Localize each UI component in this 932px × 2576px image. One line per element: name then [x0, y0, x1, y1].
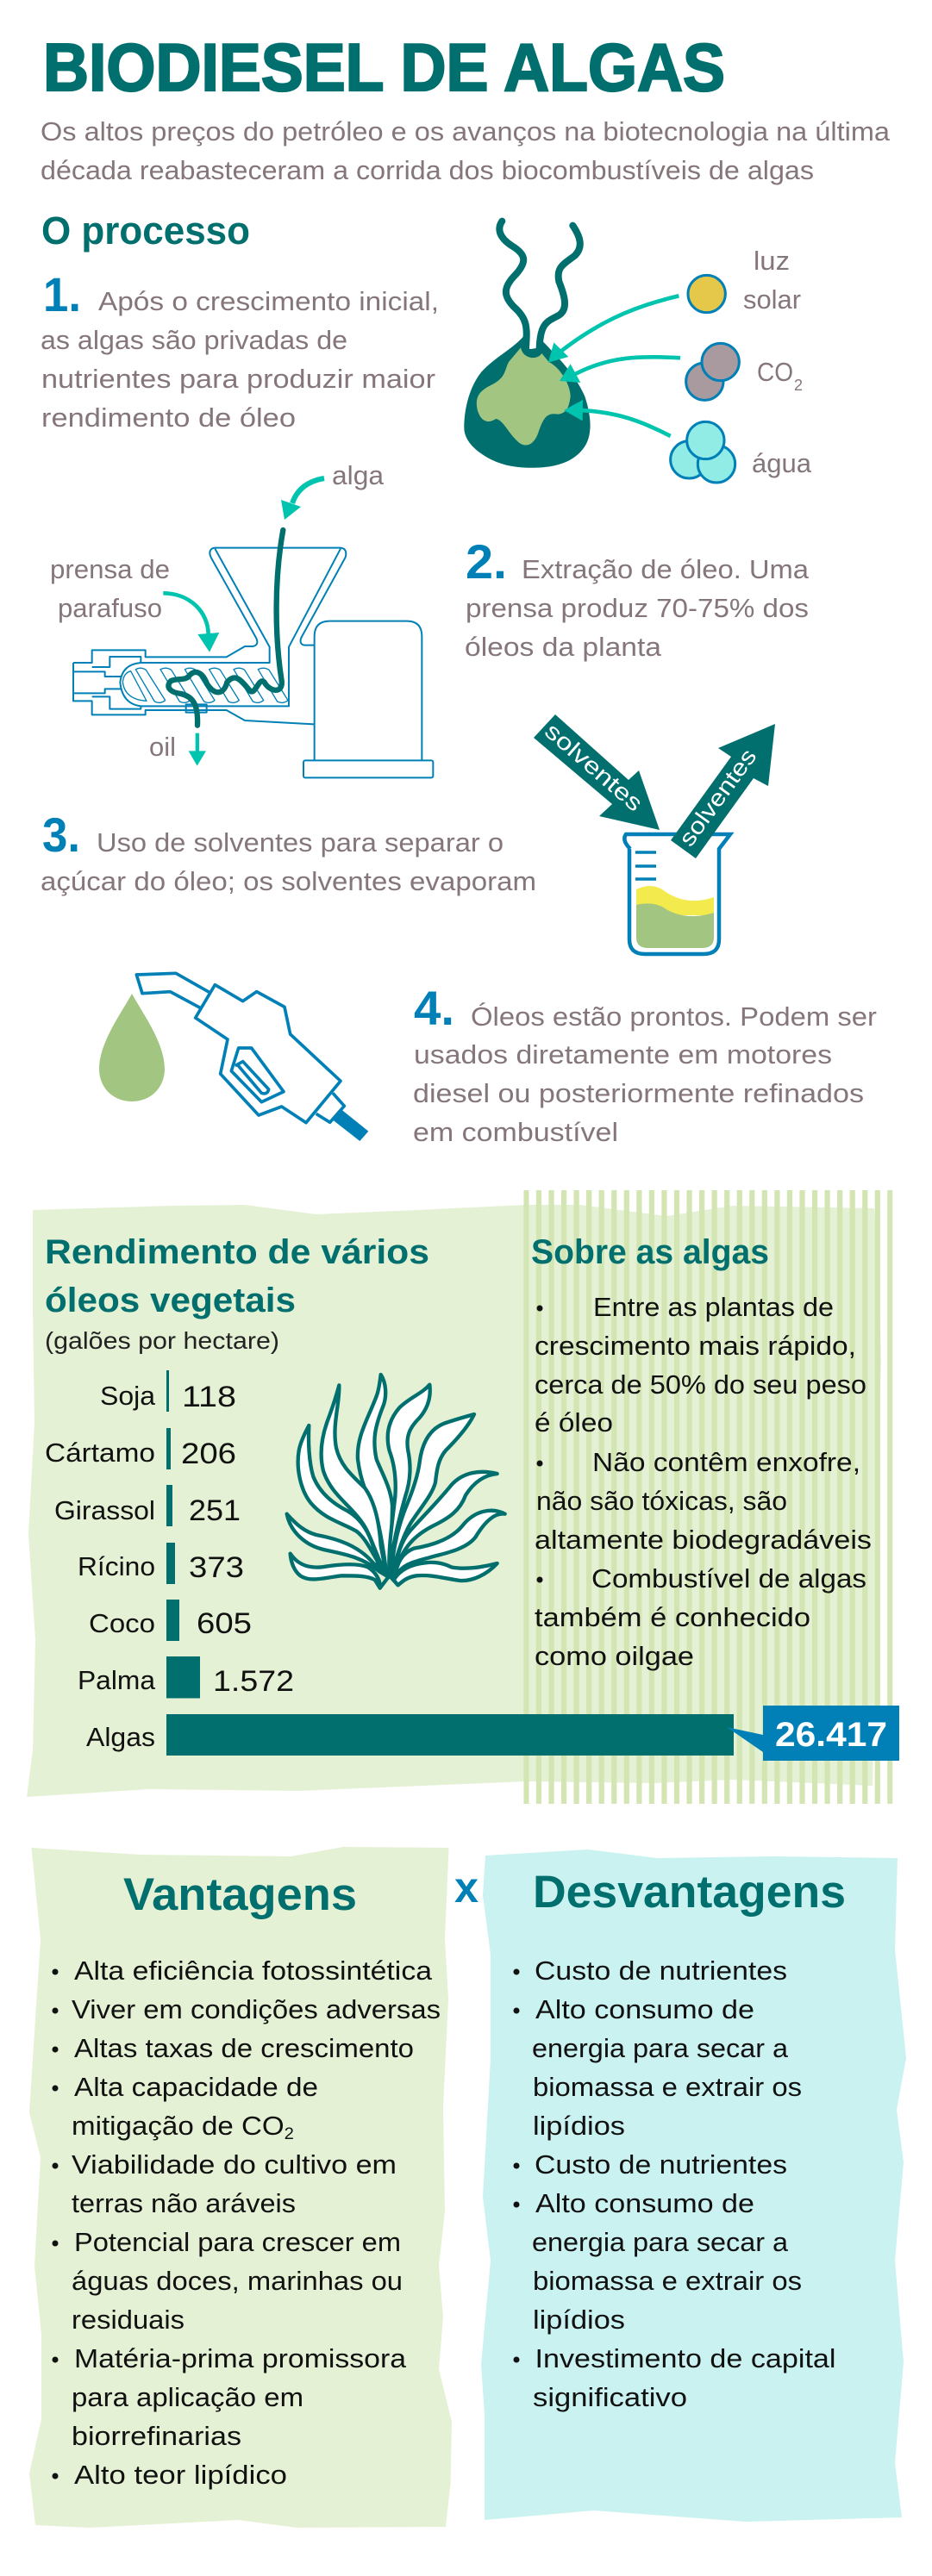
- bar values: 206: [181, 1438, 236, 1470]
- list: para aplicação em: [72, 2382, 303, 2412]
- step 4 text: diesel ou posteriormente refinados: [413, 1078, 864, 1108]
- label: prensa de parafuso: prensa de: [50, 554, 170, 584]
- step 4 text: usados diretamente em motores: [414, 1039, 832, 1070]
- label: CO2: 2: [794, 377, 803, 394]
- illustration: beaker: [624, 834, 730, 954]
- label: CO2: CO: [757, 357, 793, 387]
- step 1 text: nutrientes para produzir maior: [41, 364, 435, 394]
- list: biorrefinarias: [72, 2421, 241, 2451]
- list: about algae: Entre as plantas de: [593, 1292, 834, 1322]
- subtitle: década reabasteceram a corrida dos biocombustíveis de algas: [41, 155, 814, 185]
- arrow: solvents in: [534, 714, 660, 830]
- heading: Vantagens: [123, 1869, 357, 1920]
- bar labels: Girassol: [54, 1495, 155, 1525]
- list: lipídios: [533, 2305, 625, 2335]
- bar labels: [45, 1381, 156, 1752]
- list: Potencial para crescer em: [74, 2227, 401, 2257]
- step 4 text: 4.: [414, 981, 454, 1035]
- step 2 text: prensa produz 70-75% dos: [466, 593, 809, 623]
- step 1 text: [41, 267, 439, 433]
- list: 2: [285, 2125, 294, 2143]
- bars: [166, 1370, 734, 1756]
- list: about algae: como oilgae: [535, 1641, 694, 1671]
- heading: yield: óleos vegetais: [45, 1282, 296, 1319]
- step 2 text: 2.: [466, 534, 507, 589]
- step 2 text: óleos da planta: [465, 632, 662, 662]
- alga body: [464, 336, 591, 468]
- illustration: alga cell with inputs: [464, 221, 739, 483]
- title: BIODIESEL DE ALGAS: [43, 29, 725, 105]
- step 4 text: [413, 981, 877, 1147]
- bar labels: Soja: [100, 1381, 156, 1411]
- units note: (galões por hectare): [45, 1327, 279, 1354]
- label: prensa de parafuso: [50, 554, 170, 623]
- bar labels: Algas: [86, 1722, 155, 1752]
- list: Matéria-prima promissora: [74, 2343, 407, 2373]
- label: água: água: [752, 448, 812, 478]
- list: Viver em condições adversas: [72, 1994, 441, 2024]
- panel: desvantagens: [481, 1849, 906, 2522]
- arrow: oil out: [189, 733, 206, 766]
- list: residuais: [72, 2305, 185, 2335]
- list: about algae: Combustível de algas: [591, 1563, 866, 1594]
- heading: O processo: O processo: [41, 209, 250, 253]
- icon: water molecules: [671, 421, 735, 483]
- label: luz solar: [743, 246, 801, 315]
- heading: yield: [45, 1233, 429, 1319]
- illustration: screw press: [73, 530, 433, 777]
- label: oil: oil: [149, 732, 176, 762]
- alga interior: [477, 347, 571, 446]
- panel background: [27, 1205, 881, 1797]
- list: biomassa e extrair os: [533, 2072, 802, 2102]
- list: about algae: não são tóxicas, são: [536, 1486, 787, 1516]
- list: about algae: também é conhecido: [535, 1602, 810, 1632]
- list: águas doces, marinhas ou: [72, 2266, 403, 2296]
- step 1 text: Após o crescimento inicial,: [98, 286, 439, 316]
- icon: CO2 molecules: [686, 343, 739, 400]
- arrow: solvents in: solventes: [540, 718, 647, 816]
- step 3 text: [41, 808, 536, 896]
- bar values: 118: [182, 1381, 236, 1413]
- alga tendrils: [499, 221, 580, 347]
- step 3 text: 3.: [42, 808, 80, 862]
- bar labels: Palma: [78, 1665, 156, 1695]
- bar labels: Rícino: [78, 1551, 155, 1581]
- list: significativo: [533, 2382, 687, 2412]
- list: biomassa e extrair os: [533, 2266, 802, 2296]
- bar values: 251: [189, 1494, 241, 1527]
- bar chart: [45, 1370, 899, 1761]
- list: energia para secar a: [532, 2227, 789, 2257]
- arrow: solvents out: [671, 724, 775, 858]
- arrow: alga to press: [281, 478, 324, 520]
- callout: algae value: 26.417: [775, 1716, 887, 1754]
- list: energia para secar a: [532, 2033, 789, 2063]
- step 3 text: açúcar do óleo; os solventes evaporam: [41, 866, 536, 896]
- panel: vantagens: [29, 1847, 452, 2528]
- bar values: 373: [189, 1551, 244, 1584]
- label: alga: alga: [332, 460, 385, 490]
- list: mitigação de CO: [72, 2111, 271, 2141]
- list: Investimento de capital: [535, 2343, 836, 2373]
- list: Custo de nutrientes: [535, 2149, 787, 2180]
- list: lipídios: [533, 2111, 625, 2141]
- step 2 text: [465, 534, 810, 662]
- list: Alto consumo de: [535, 1994, 754, 2024]
- icon: sunlight: [688, 275, 725, 313]
- arrow: press pointer: [163, 593, 219, 652]
- step 1 text: 1.: [43, 267, 81, 321]
- list: Alto teor lipídico: [74, 2460, 287, 2490]
- striped column: [523, 1190, 892, 1804]
- bar labels: Coco: [89, 1608, 155, 1638]
- list: about algae: altamente biodegradáveis: [535, 1525, 872, 1555]
- bar labels: Cártamo: [45, 1438, 155, 1468]
- step 3 text: Uso de solventes para separar o: [97, 827, 504, 858]
- bar values: [181, 1381, 294, 1698]
- callout: algae value: [727, 1706, 899, 1761]
- panel background: [481, 1849, 906, 2522]
- step 1 text: rendimento de óleo: [41, 402, 296, 433]
- screw threads: [122, 668, 288, 702]
- label: luz solar: solar: [743, 284, 801, 315]
- press casing: [73, 548, 346, 724]
- beaker ticks: [635, 852, 656, 879]
- subtitle: Os altos preços do petróleo e os avanços na biotecnologia na última: [41, 116, 891, 147]
- heading: yield: Rendimento de vários: [45, 1233, 429, 1271]
- beaker glass: [624, 834, 730, 954]
- icon: fuel nozzle: [136, 973, 368, 1141]
- press motor: [303, 621, 433, 777]
- icon: oil drop: [99, 994, 165, 1101]
- heading: about algae: Sobre as algas: [531, 1233, 769, 1271]
- list: Altas taxas de crescimento: [74, 2033, 414, 2063]
- heading: Desvantagens: [533, 1867, 846, 1918]
- list: [514, 1955, 836, 2412]
- bar values: 605: [197, 1607, 252, 1640]
- icon: seaweed: [287, 1375, 505, 1588]
- list: [52, 1955, 441, 2490]
- list: Alta eficiência fotossintética: [74, 1955, 433, 1986]
- arrow: solvents out: solventes: [674, 744, 761, 851]
- list: Custo de nutrientes: [535, 1955, 787, 1986]
- list: about algae: [535, 1292, 872, 1671]
- bar values: 1.572: [213, 1665, 294, 1698]
- list: about algae: crescimento mais rápido,: [535, 1331, 856, 1361]
- step 4 text: Óleos estão prontos. Podem ser: [471, 1001, 877, 1032]
- subtitle: [41, 116, 891, 185]
- list: about algae: Não contêm enxofre,: [592, 1447, 860, 1477]
- step 1 text: as algas são privadas de: [41, 325, 347, 355]
- alga passing through press: [168, 530, 283, 726]
- panel: yield and about algae: [27, 1190, 899, 1804]
- label: prensa de parafuso: parafuso: [58, 593, 162, 623]
- list: Alta capacidade de: [74, 2072, 318, 2102]
- list: terras não aráveis: [72, 2188, 296, 2218]
- label: luz solar: luz: [754, 246, 790, 276]
- step 2 text: Extração de óleo. Uma: [522, 554, 810, 584]
- list: Alto consumo de: [535, 2188, 754, 2218]
- arrows into alga: [548, 296, 680, 436]
- beaker liquids: [636, 886, 714, 915]
- step 4 text: em combustível: [413, 1117, 618, 1147]
- list: about algae: cerca de 50% do seu peso: [535, 1369, 866, 1400]
- list: about algae: é óleo: [535, 1407, 613, 1438]
- versus mark: x: [454, 1863, 479, 1912]
- list: Viabilidade do cultivo em: [72, 2149, 397, 2180]
- panel background: [29, 1847, 452, 2528]
